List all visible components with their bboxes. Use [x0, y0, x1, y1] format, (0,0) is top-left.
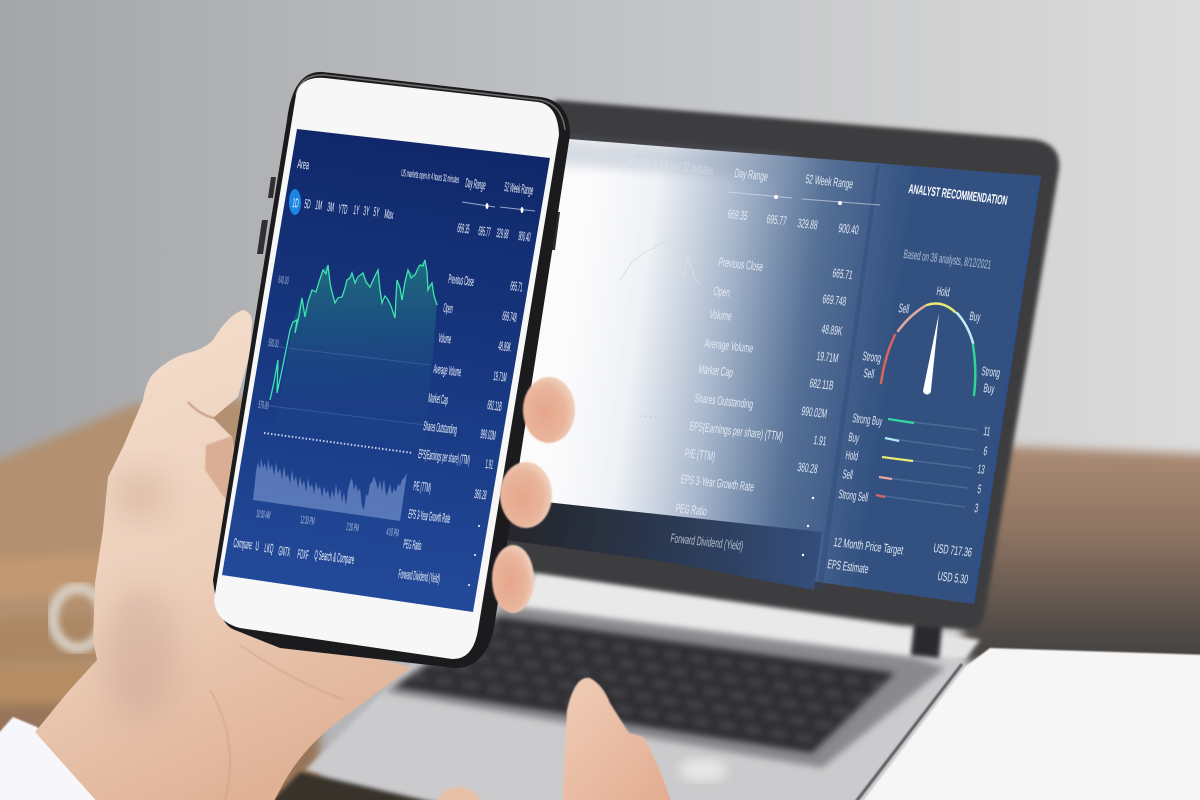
- laptop hinge: [911, 615, 943, 658]
- main laptop stats: 695.77: [765, 213, 788, 229]
- analyst recommendation panel: Buy: [982, 382, 995, 397]
- phone: [213, 72, 570, 668]
- time range buttons: Max: [383, 207, 394, 223]
- time range buttons: YTD: [337, 202, 348, 218]
- compare row: LKQ: [263, 541, 274, 557]
- main laptop stats: 19.71M: [815, 350, 839, 366]
- key statistics list: 665.71: [509, 279, 523, 296]
- gauge needle: [923, 313, 939, 395]
- faded dotted line: [640, 416, 678, 420]
- phone white face: [214, 78, 559, 659]
- touchpad highlight: [679, 758, 727, 782]
- wooden table, left side: [0, 395, 320, 800]
- main laptop stats: 669.748: [821, 293, 847, 309]
- key statistics list: 990.02M: [479, 427, 497, 444]
- analyst recommendation panel: Sell: [862, 367, 875, 382]
- laptop base with keyboard: [268, 572, 980, 800]
- main laptop stats: Volume: [708, 308, 733, 324]
- compare row: Compare:: [232, 536, 254, 553]
- phone screen content: [232, 158, 535, 587]
- analyst recommendation panel: USD 717.36: [932, 542, 973, 560]
- main laptop stats: [626, 154, 880, 556]
- gauge: [881, 304, 975, 395]
- top status and ranges: Day Range: [464, 176, 487, 194]
- volume chart: [253, 458, 407, 521]
- compare row: FOXF: [296, 547, 309, 563]
- analyst recommendation panel: USD 5.30: [936, 570, 969, 587]
- top status and ranges: 669.35: [456, 221, 470, 238]
- analyst recommendation panel: Strong Buy: [851, 412, 883, 429]
- key statistics list: 669.748: [501, 309, 517, 326]
- key statistics list: Shares Outstanding: [422, 419, 458, 438]
- main laptop stats: 48.89K: [820, 323, 843, 339]
- grey frame around keyboard: [385, 606, 945, 768]
- coil object on table: [53, 588, 103, 648]
- key statistics list: 48.89K: [497, 339, 512, 356]
- time range buttons: 1D: [291, 196, 299, 212]
- key statistics list: EPS(Earnings per share) (TTM): [417, 447, 471, 468]
- time axis labels: 2:30 PM: [346, 521, 360, 534]
- laptop screen: [490, 138, 1041, 604]
- analyst recommendation panel: Based on 38 analysts, 8/12/2021: [902, 248, 992, 273]
- analyst recommendation panel: Buy: [968, 310, 981, 325]
- key statistics list: Average Volume: [432, 362, 462, 380]
- fingertip: index finger: [523, 377, 575, 443]
- fingertip: middle finger: [500, 462, 552, 528]
- compare row: U: [254, 539, 260, 554]
- main laptop stats: Day Range: [733, 167, 769, 184]
- price chart: 570.00: [258, 399, 269, 412]
- price chart: [258, 260, 437, 445]
- white paper, bottom right: [860, 648, 1200, 800]
- phone top rim highlight: [296, 75, 565, 130]
- recommendation bars: [876, 419, 977, 507]
- panel divider: [817, 165, 880, 590]
- key statistics list: Open: [442, 301, 454, 317]
- main laptop stats: 360.28: [796, 461, 819, 477]
- top status and ranges: 900.40: [517, 229, 531, 246]
- time range buttons: 1Y: [352, 203, 360, 219]
- main laptop stats: ets open in 4 hours 32 minutes: [626, 154, 714, 178]
- key statistics list: PEG Ratio: [402, 537, 422, 554]
- analyst recommendation panel: EPS Estimate: [826, 558, 870, 577]
- main laptop stats: Average Volume: [703, 337, 754, 356]
- time axis labels: 4:00 PM: [386, 526, 400, 539]
- main laptop stats: P/E (TTM): [683, 447, 716, 464]
- main laptop stats: Market Cap: [697, 363, 734, 381]
- main laptop stats: 682.11B: [808, 377, 835, 393]
- main laptop stats: 1.91: [812, 434, 828, 449]
- top status and ranges: [296, 158, 535, 246]
- analyst recommendation panel: Hold: [935, 285, 951, 300]
- key statistics list: [397, 272, 523, 587]
- dark area below base: [268, 772, 445, 800]
- analyst recommendation panel: Buy: [847, 431, 860, 446]
- key statistics list: EPS 3-Year Growth Rate: [407, 507, 451, 527]
- main laptop stats: EPS 3-Year Growth Rate: [679, 473, 755, 495]
- analyst recommendation panel: Strong Sell: [837, 488, 869, 505]
- main laptop stats: Open: [712, 285, 731, 301]
- analyst recommendation panel: Hold: [844, 449, 859, 464]
- phone blue screen: [222, 129, 550, 612]
- main laptop stats: 665.71: [831, 267, 854, 283]
- time range buttons: [289, 189, 394, 223]
- main laptop stats: 669.35: [726, 208, 749, 224]
- base right edge: [855, 664, 962, 800]
- bottom band of screen: [490, 496, 822, 590]
- time range buttons: 5D: [303, 197, 311, 213]
- main laptop stats: PEG Ratio: [674, 502, 708, 519]
- time axis labels: 10:00 AM: [256, 508, 271, 522]
- main laptop stats: EPS(Earnings per share) (TTM): [688, 420, 784, 444]
- main laptop stats: Previous Close: [717, 256, 764, 275]
- curled finger behind thumb: [205, 436, 236, 500]
- analyst recommendation panel: Strong: [980, 365, 1001, 381]
- laptop lid bezel: [495, 100, 1059, 630]
- key statistics list: 360.28: [473, 487, 487, 504]
- key statistics list: Volume: [437, 331, 452, 348]
- key statistics list: P/E (TTM): [412, 479, 432, 496]
- phone side buttons: [268, 177, 276, 198]
- palm creases: [210, 645, 345, 800]
- faded mini price chart: [620, 241, 700, 285]
- time range buttons: 1M: [314, 198, 323, 214]
- dotted separator: [264, 433, 413, 453]
- time axis labels: 12:30 PM: [300, 514, 315, 528]
- key statistics list: Forward Dividend (Yield): [397, 567, 441, 587]
- analyst recommendation panel: Strong: [861, 350, 882, 366]
- key statistics list: Previous Close: [447, 272, 475, 290]
- wooden table, right side: [960, 445, 1200, 690]
- top status and ranges: 52 Week Range: [503, 180, 534, 199]
- main laptop stats: Shares Outstanding: [693, 392, 754, 412]
- analyst recommendation panel: 12 Month Price Target: [832, 536, 904, 558]
- holding hand: palm and thumb: [35, 310, 411, 800]
- key statistics list: Market Cap: [427, 391, 449, 408]
- price chart: 580.00: [268, 337, 279, 350]
- analyst recommendation panel: 6: [982, 445, 988, 459]
- top status and ranges: 329.88: [495, 226, 509, 243]
- compare row: [232, 536, 355, 568]
- second hand, bottom right fingers: [436, 678, 672, 800]
- key statistics list: 19.71M: [492, 369, 507, 386]
- key statistics list: 682.11B: [486, 398, 503, 415]
- time axis labels: [256, 508, 400, 539]
- top status and ranges: Area: [296, 158, 310, 173]
- thumb crease: [188, 402, 214, 418]
- main laptop stats: 52 Week Range: [804, 173, 854, 192]
- time range buttons: 3Y: [362, 204, 370, 220]
- main laptop stats: 990.02M: [800, 405, 828, 422]
- main laptop stats: 900.40: [837, 222, 860, 238]
- top shading of screen: [556, 138, 790, 180]
- analyst recommendation panel: ANALYST RECOMMENDATION: [907, 183, 1008, 209]
- white shirt sleeve: [0, 717, 102, 800]
- knuckle shading: [112, 471, 168, 519]
- analyst recommendation panel: 5: [976, 483, 982, 497]
- analyst recommendation panel: 3: [973, 502, 979, 516]
- time range buttons: 3M: [326, 200, 335, 216]
- time range buttons: 5Y: [372, 205, 380, 221]
- analyst recommendation panel: Sell: [841, 468, 854, 483]
- analyst recommendation panel: 13: [976, 463, 986, 478]
- main laptop stats: Forward Dividend (Yield): [669, 532, 744, 554]
- price chart: 640.00: [278, 274, 289, 287]
- lower hand shading: [104, 585, 176, 725]
- top status and ranges: US markets open in 4 hours 32 minutes: [401, 167, 460, 186]
- keyboard: [395, 617, 895, 753]
- phone body: [213, 72, 570, 668]
- main laptop stats: 329.88: [796, 217, 819, 233]
- white rear strip of the base: [523, 572, 915, 657]
- compare row: Q Search & Compare: [313, 548, 355, 568]
- compare row: GNTX: [277, 544, 291, 560]
- fingertip: ring finger: [492, 545, 534, 613]
- analyst recommendation panel: [826, 183, 1008, 587]
- analyst recommendation panel: 11: [982, 425, 991, 440]
- key statistics list: 1.91: [484, 457, 494, 473]
- top status and ranges: 695.77: [477, 224, 491, 241]
- analyst recommendation panel: Sell: [897, 302, 910, 317]
